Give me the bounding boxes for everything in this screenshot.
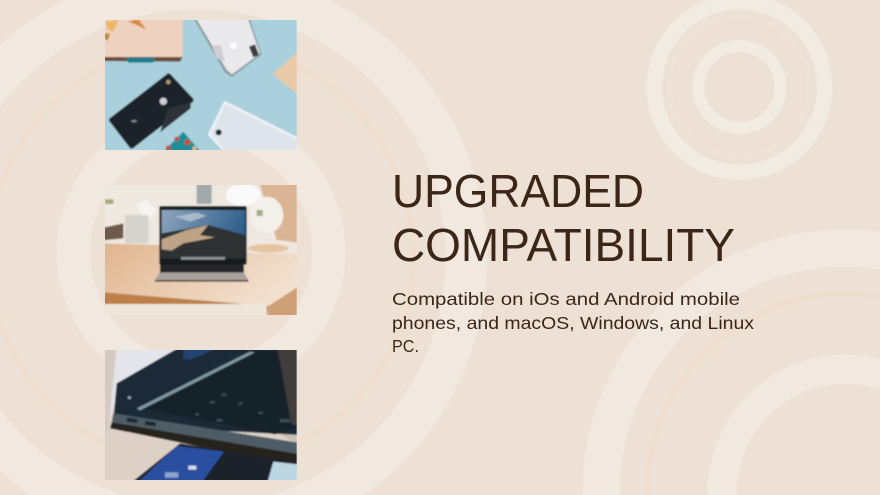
title: [392, 165, 735, 271]
slide content: [105, 20, 754, 480]
photo: laptop on wooden table: [105, 185, 297, 315]
photo: phones on blue background: [105, 20, 297, 150]
body text: [392, 289, 754, 356]
body text: Compatible on iOs and Android mobile: [392, 289, 740, 309]
title: COMPATIBILITY: [392, 219, 735, 271]
photo: dark laptop and phone close-up: [105, 350, 297, 480]
body text: PC.: [392, 336, 419, 356]
body text: phones, and macOS, Windows, and Linux: [392, 313, 754, 333]
title: UPGRADED: [392, 165, 644, 217]
